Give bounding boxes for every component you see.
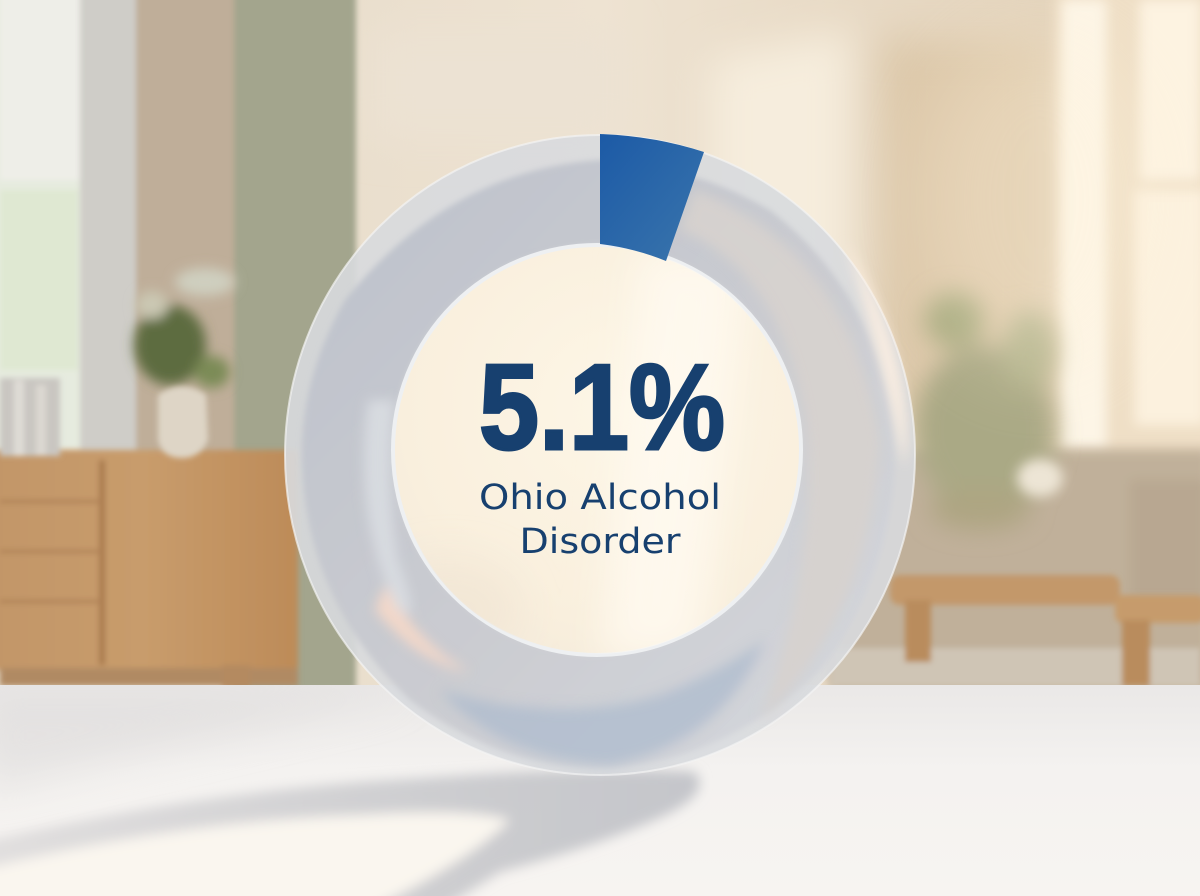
table shadow	[0, 690, 700, 896]
left plant and vase	[134, 268, 235, 458]
wall light panels	[710, 31, 1046, 444]
right plant bright leaf	[1017, 459, 1063, 497]
percentage value: 5.1%	[479, 339, 725, 475]
ring highlights	[364, 190, 906, 765]
donut chart	[285, 134, 915, 775]
right lower wall and sofa	[830, 450, 1200, 690]
sun glow	[929, 54, 1058, 376]
ring track	[302, 160, 895, 768]
hole	[393, 245, 801, 655]
left wall sections	[0, 0, 356, 690]
label: Ohio Alcohol	[479, 478, 721, 518]
table surface	[0, 685, 1200, 896]
label line two: Disorder	[520, 522, 681, 562]
outer rim	[285, 135, 915, 775]
right window	[1055, 0, 1200, 450]
hole light streaks	[424, 259, 738, 652]
cabinet	[0, 450, 298, 689]
room background	[0, 0, 1200, 690]
bench	[830, 575, 1200, 686]
table soft shade	[0, 705, 227, 780]
right plant	[915, 292, 1056, 530]
blue segment	[600, 134, 704, 261]
books	[0, 378, 60, 456]
